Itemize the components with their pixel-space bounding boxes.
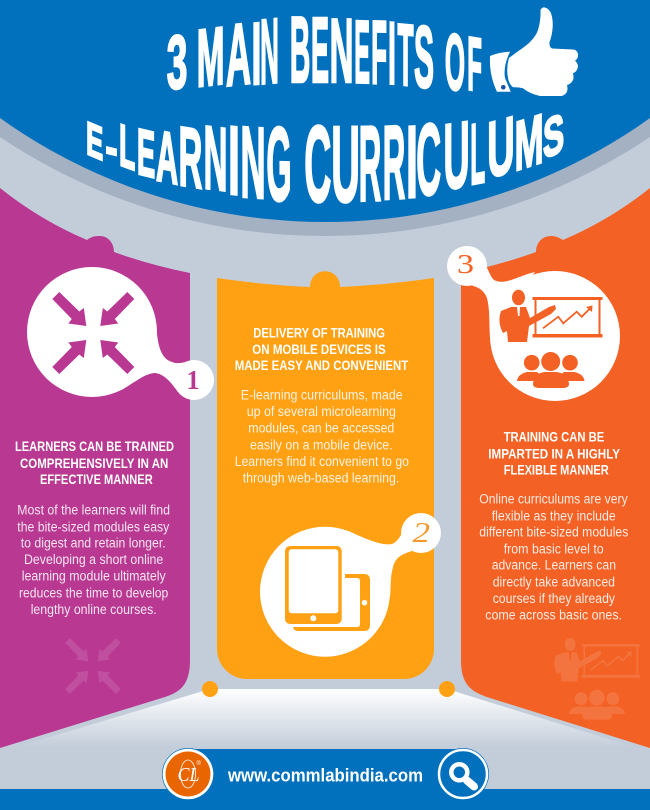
text: benefit 1 body — [17, 503, 170, 617]
title line 1: T — [398, 4, 414, 105]
title line 2: E — [137, 114, 155, 192]
icon: ghost inward arrows — [65, 638, 121, 694]
badge: circle with number 3: 3 — [457, 249, 474, 279]
title line 2: M — [515, 99, 544, 186]
title line 1: S — [414, 7, 434, 107]
title line 1: 3 — [167, 19, 187, 106]
panel shape yellow — [217, 271, 434, 679]
title line 1: F — [371, 3, 387, 104]
badge: circle with number 1 — [27, 267, 214, 400]
dot: floor left — [202, 681, 218, 697]
title line 2: C — [416, 102, 441, 219]
logo: CommLab: CL — [178, 764, 200, 786]
title line 1: A — [226, 6, 251, 106]
title line 1: F — [467, 20, 482, 108]
title line 1 — [167, 0, 482, 109]
title line 2: L — [119, 111, 135, 183]
icon: magnifying glass — [437, 748, 489, 800]
title line 2: G — [266, 107, 292, 224]
title line 1: O — [445, 15, 465, 109]
text: benefit 2 body: easily on a mobile device. — [250, 437, 393, 452]
text: benefit 3 body: courses if they already — [493, 591, 615, 606]
title line 1: I — [252, 5, 261, 104]
heading: benefit 2: ON MOBILE DEVICES IS — [252, 341, 386, 357]
footer — [0, 748, 650, 810]
header shadow band — [0, 0, 650, 236]
panel shape orange — [461, 188, 650, 748]
title line 1: I — [388, 3, 396, 103]
logo: CommLab: ® — [196, 760, 202, 767]
badge: circle with number 2: 2 — [412, 518, 430, 549]
title line 1: E — [311, 0, 329, 102]
heading: benefit 1 — [15, 438, 174, 487]
icon: ghost presenter — [554, 638, 640, 720]
text: benefit 2 body: modules, can be accessed — [248, 421, 394, 436]
title line 1: B — [290, 0, 310, 102]
title line 2: R — [179, 108, 202, 207]
panel shape magenta — [0, 188, 190, 748]
title line 2: I — [406, 104, 418, 220]
title line 1: M — [197, 10, 224, 105]
title line 2: N — [240, 106, 266, 221]
heading: benefit 3: FLEXIBLE MANNER — [504, 462, 609, 478]
heading: benefit 3 — [488, 429, 621, 478]
text: benefit 1 body: learning module ultimately — [22, 569, 166, 584]
text: benefit 3 body: Online curriculums are very — [479, 492, 628, 507]
title line 2: U — [444, 103, 470, 211]
title line 2: I — [228, 106, 240, 217]
text: benefit 3 body: flexible as they include — [492, 508, 616, 523]
title line 1: N — [260, 1, 279, 104]
icon: presenter with audience — [499, 290, 602, 388]
header blue arc — [0, 0, 650, 222]
text: benefit 3 body: directly take advanced — [493, 574, 615, 589]
text: benefit 3 body — [479, 492, 629, 623]
website address: www.commlabindia.com — [227, 766, 423, 786]
text: benefit 2 body: through web-based learning. — [243, 471, 399, 486]
heading: benefit 1: EFFECTIVE MANNER — [40, 471, 153, 487]
title line 1: E — [354, 2, 370, 102]
text: benefit 2 body: Learners find it convenient to go — [235, 454, 409, 469]
panel: benefit 1 — [0, 188, 214, 748]
heading: benefit 2 — [235, 324, 409, 373]
text: benefit 3 body: from basic level to — [504, 541, 604, 556]
badge: circle with number 1: 1 — [186, 365, 200, 395]
title — [86, 0, 564, 226]
heading: benefit 1: LEARNERS CAN BE TRAINED — [15, 438, 174, 454]
title line 2: E — [86, 112, 103, 172]
footer centre bar — [188, 749, 463, 790]
text: benefit 1 body: Developing a short online — [24, 552, 163, 567]
text: benefit 1 body: Most of the learners will find — [17, 503, 170, 518]
badge: circle with number 3 — [447, 246, 620, 401]
title line 2: R — [359, 102, 381, 224]
heading: benefit 2: DELIVERY OF TRAINING — [253, 324, 385, 340]
title line 2: - — [105, 120, 118, 176]
text: benefit 3 body: advance. Learners can — [492, 558, 616, 573]
title line 1: N — [330, 0, 353, 102]
heading: benefit 1: COMPREHENSIVELY IN AN — [20, 455, 168, 471]
icon: tablet and phone — [285, 546, 370, 631]
badge: circle with number 2 — [260, 513, 441, 657]
panel: benefit 2 — [217, 271, 441, 679]
heading: benefit 2: MADE EASY AND CONVENIENT — [235, 357, 409, 373]
text: benefit 1 body: lengthy online courses. — [31, 602, 157, 617]
title line 2: R — [383, 105, 405, 222]
text: benefit 1 body: to digest and retain longer. — [21, 535, 166, 550]
floor spotlight — [0, 689, 650, 760]
footer full-width bar — [0, 789, 650, 810]
title line 2: A — [156, 115, 178, 200]
dot: floor right — [439, 681, 455, 697]
title line 2: S — [543, 101, 564, 171]
text: benefit 2 body: up of several microlearning — [247, 404, 396, 419]
title line 2: C — [304, 105, 331, 226]
title line 2: N — [204, 108, 227, 211]
heading: benefit 3: IMPARTED IN A HIGHLY — [488, 445, 621, 461]
heading: benefit 3: TRAINING CAN BE — [504, 429, 604, 445]
text: benefit 3 body: different bite-sized modules — [479, 525, 629, 540]
title line 2 — [86, 99, 564, 226]
text: benefit 1 body: the bite-sized modules easy — [17, 519, 170, 534]
icon: thumbs up — [490, 7, 578, 96]
icon: inward arrows — [52, 292, 134, 374]
logo: CommLab — [162, 748, 214, 800]
title line 2: U — [331, 104, 360, 226]
title line 2: U — [487, 100, 515, 196]
text: benefit 2 body: E-learning curriculums, made — [241, 387, 403, 402]
panel: benefit 3 — [447, 188, 650, 748]
text: benefit 2 body — [235, 387, 409, 486]
text: benefit 3 body: come across basic ones. — [485, 608, 622, 623]
text: benefit 1 body: reduces the time to develop — [19, 585, 168, 600]
title line 2: L — [470, 104, 485, 204]
